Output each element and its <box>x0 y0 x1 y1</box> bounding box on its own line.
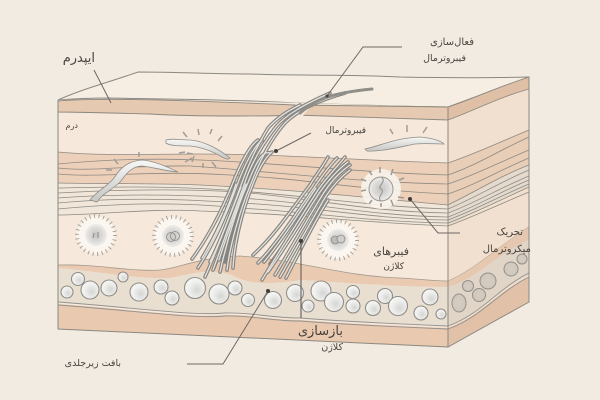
fibre zone front <box>58 183 448 226</box>
collagen fibre bundle 1 <box>192 93 345 277</box>
fibre zone side <box>448 165 529 226</box>
fat layer side <box>448 240 529 326</box>
front face <box>58 100 448 347</box>
label: microthermal stimulation: میکروترمال <box>483 244 531 255</box>
label: fibroblast activation: فعال‌سازی <box>430 37 474 48</box>
fibroblast right <box>365 125 444 151</box>
label: epidermis: ایپدرم <box>63 51 95 66</box>
fat layer front <box>58 268 448 326</box>
activated fibre strand <box>300 89 372 113</box>
collagen cell 3 <box>319 221 357 259</box>
bottom peach layer front <box>58 304 448 347</box>
double membrane line <box>58 273 529 329</box>
label: collagen fibres: کلاژن <box>383 262 405 272</box>
fat cells side <box>452 254 527 312</box>
side face <box>448 77 529 347</box>
label: fibroblast: فیبروترمال <box>325 126 366 136</box>
label: collagen remodeling: بازسازی <box>298 324 343 339</box>
dermis layer lines <box>58 130 529 226</box>
activated microthermal cell <box>361 167 404 209</box>
leader: collagen remodeling <box>299 239 303 318</box>
hypodermis band side <box>448 227 529 287</box>
label: fibroblast activation: فیبروترمال <box>423 53 466 64</box>
fibroblast left lower <box>90 152 185 202</box>
epidermis band side <box>448 77 529 120</box>
hypodermis peach band front <box>58 256 448 287</box>
label: collagen fibres <box>373 245 409 272</box>
collagen cell 1 <box>77 216 115 254</box>
label: fibroblast activation <box>423 37 474 64</box>
collagen fibre bundle 2 <box>253 157 350 280</box>
upper dermis peach band front <box>58 152 448 205</box>
fibroblast upper left <box>166 129 230 168</box>
leader: epidermis <box>94 70 111 103</box>
skin block diagram <box>58 72 529 347</box>
fat cells front <box>61 272 446 320</box>
bottom peach layer side <box>448 277 529 347</box>
leader: fibroblast activation <box>325 47 402 98</box>
label: collagen remodeling: کلاژن <box>321 342 343 353</box>
upper dermis band side <box>448 130 529 205</box>
label: collagen remodeling <box>298 324 343 353</box>
label: microthermal stimulation: تحریک <box>496 227 523 238</box>
epidermis gap where the fibres pass <box>284 104 313 117</box>
leader: subcutaneous tissue <box>187 289 270 364</box>
top surface of the epidermis <box>58 72 529 107</box>
hypodermis top line <box>58 227 529 281</box>
arrow: fibroblast <box>274 133 311 153</box>
epidermis band front <box>58 99 448 120</box>
label: dermis: درم <box>66 121 78 130</box>
leader: microthermal stimulation <box>408 197 460 233</box>
label: subcutaneous tissue: بافت زیرجلدی <box>65 358 121 369</box>
label: microthermal stimulation <box>483 227 531 255</box>
collagen cell 2 <box>154 217 192 255</box>
block outline <box>58 77 529 347</box>
label: collagen fibres: فیبرهای <box>373 245 409 258</box>
